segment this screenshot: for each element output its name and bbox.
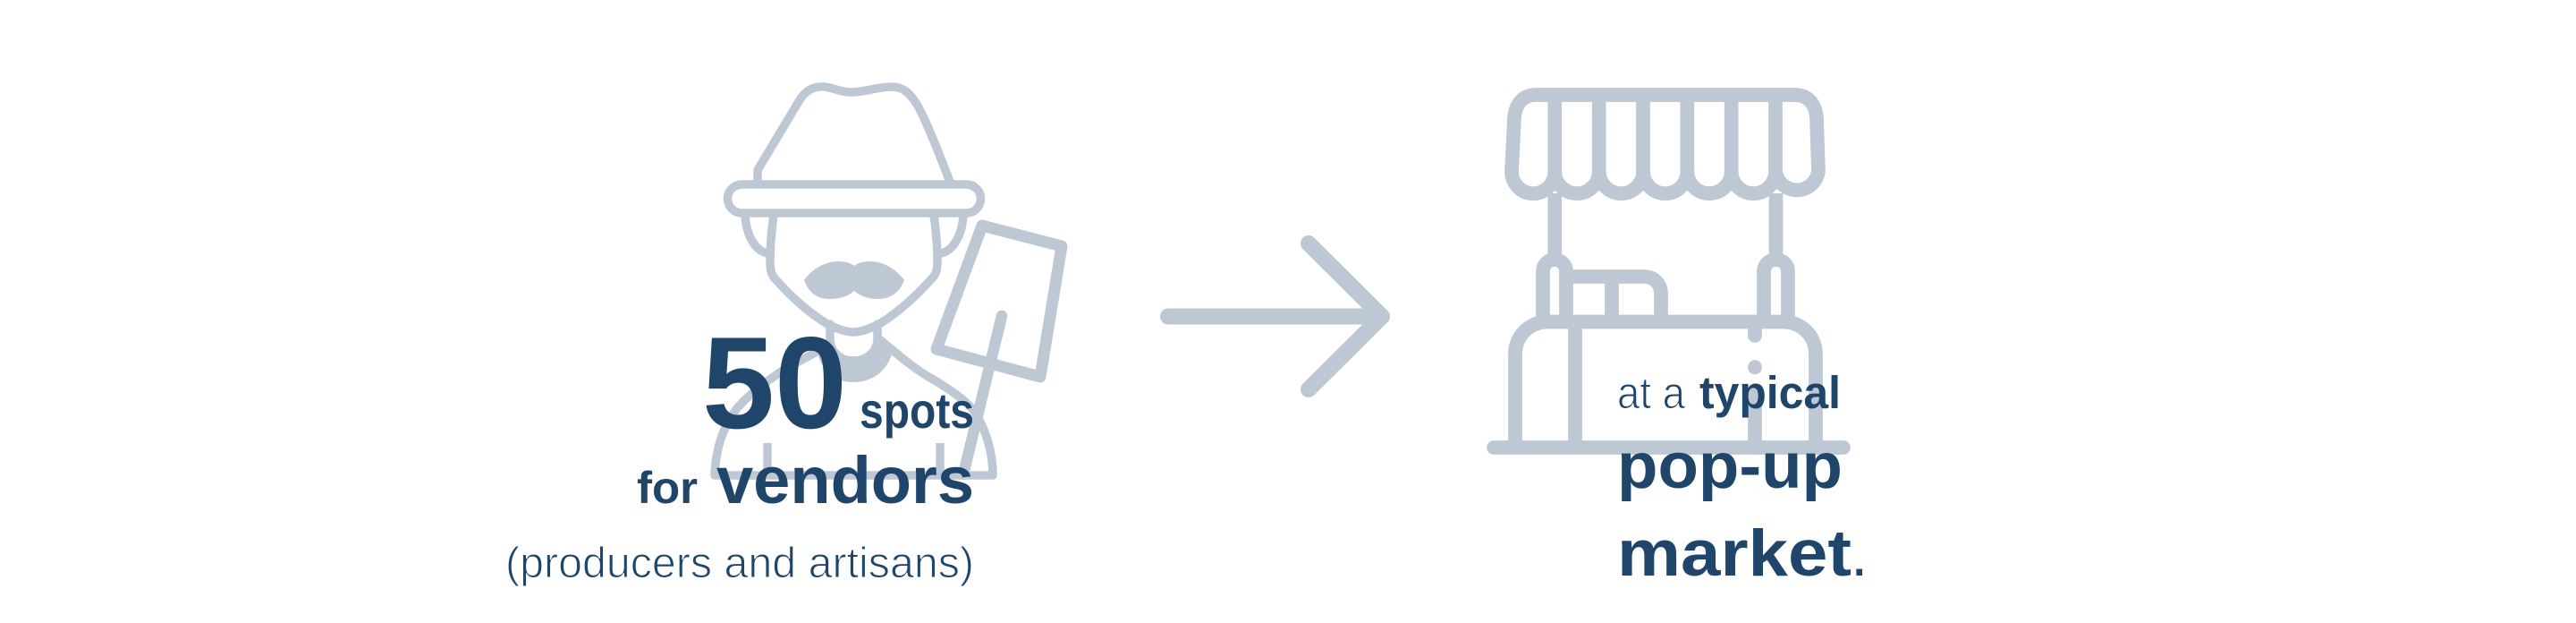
word spots: spots xyxy=(860,382,974,439)
right arm line xyxy=(936,443,945,475)
hat brim xyxy=(728,184,980,213)
sign handle xyxy=(963,316,1002,474)
text: 50 spots for vendors xyxy=(505,310,974,587)
word for: for xyxy=(637,463,698,513)
words at a: at a xyxy=(1617,368,1685,418)
stall poles xyxy=(1555,193,1776,255)
producers note: (producers and artisans) xyxy=(505,540,974,587)
sign board xyxy=(936,226,1062,377)
right ear xyxy=(941,215,963,253)
left post sleeve xyxy=(1543,260,1566,321)
face outline xyxy=(770,215,937,332)
body outline xyxy=(715,338,993,475)
left arm line xyxy=(763,443,772,475)
number 50: 50 xyxy=(702,310,847,456)
arrow xyxy=(1168,243,1382,389)
word vendors: vendors xyxy=(716,443,974,517)
icon: vendor with hat and shovel sign xyxy=(715,87,1062,475)
awning xyxy=(1512,95,1818,193)
counter xyxy=(1515,322,1816,448)
word pop-up: pop-up xyxy=(1617,431,1843,502)
hat crown xyxy=(758,87,950,182)
period: . xyxy=(1851,519,1868,589)
neck xyxy=(830,324,877,361)
ground bar xyxy=(1494,440,1843,455)
word typical: typical xyxy=(1699,367,1841,418)
word market: market xyxy=(1617,517,1852,590)
goods box xyxy=(1566,277,1661,321)
right post sleeve xyxy=(1764,260,1788,321)
left ear xyxy=(745,215,767,253)
moustache xyxy=(804,261,904,299)
text: at a typical pop-up market xyxy=(1617,367,1868,590)
counter door line xyxy=(1748,324,1762,448)
icon: market stall xyxy=(1494,95,1843,448)
collar xyxy=(818,338,892,382)
counter divider xyxy=(1568,321,1582,448)
awning stripes xyxy=(1555,95,1775,171)
